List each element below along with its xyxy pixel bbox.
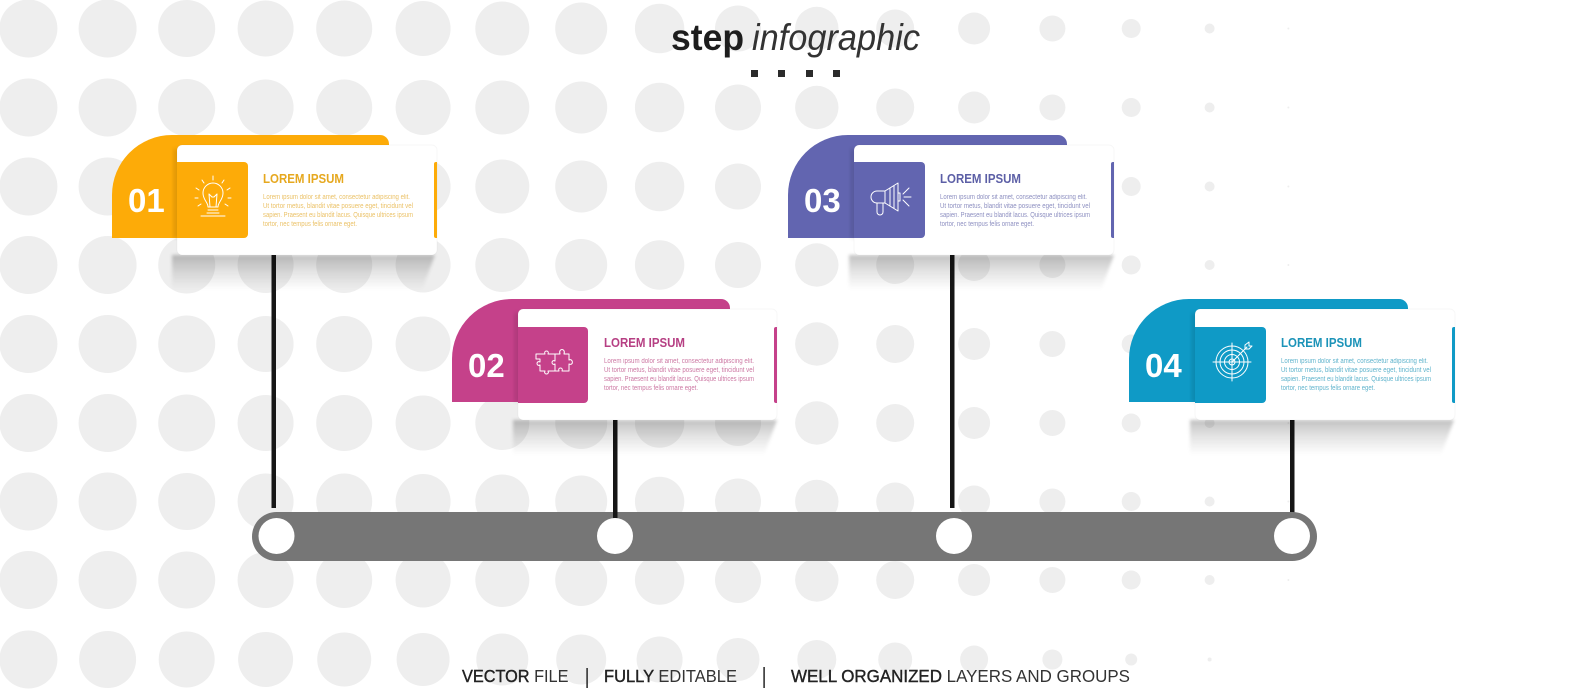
body text: sapien. Praesent eu blandit lacus. Quisque ultrices ipsum <box>1281 376 1431 383</box>
footer: FULLY EDITABLE <box>604 666 737 686</box>
body text: tortor, nec tempus felis ornare eget. <box>1281 385 1375 392</box>
body text: Ut tortor metus, blandit vitae posuere eget, tincidunt vel <box>604 367 754 374</box>
body text: tortor, nec tempus felis ornare eget. <box>604 385 698 392</box>
panel: step 2 <box>452 299 777 455</box>
panel: step 3 <box>788 135 1114 290</box>
card: step 4 <box>1195 309 1455 420</box>
accent bar <box>774 327 777 403</box>
title dots <box>751 70 840 77</box>
tab: step 2 <box>452 299 730 402</box>
body text: Ut tortor metus, blandit vitae posuere eget, tincidunt vel <box>263 203 413 210</box>
timeline node 2 <box>597 518 633 554</box>
stem: step 2 <box>613 415 618 515</box>
icon tile <box>1195 327 1266 403</box>
background dot pattern <box>0 0 1289 688</box>
body text <box>940 194 1090 228</box>
heading: LOREM IPSUM <box>604 336 685 350</box>
tab: step 1 <box>112 135 389 238</box>
body text <box>1281 358 1431 392</box>
timeline node 4 <box>1274 518 1310 554</box>
card: step 2 <box>518 309 777 420</box>
stem end: step 2 <box>613 512 618 518</box>
number 03: 03 <box>804 182 841 219</box>
body text: tortor, nec tempus felis ornare eget. <box>940 221 1034 228</box>
accent bar <box>1111 162 1114 238</box>
body text: Lorem ipsum dolor sit amet, consectetur adipiscing elit. <box>1281 358 1428 365</box>
timeline node 3 <box>936 518 972 554</box>
title: step <box>671 17 744 58</box>
body text <box>604 358 754 392</box>
footer: WELL ORGANIZED LAYERS AND GROUPS <box>791 666 1130 686</box>
stem: step 1 <box>272 250 276 508</box>
body text: Ut tortor metus, blandit vitae posuere eget, tincidunt vel <box>940 203 1090 210</box>
title: infographic <box>752 17 920 58</box>
number 01: 01 <box>128 182 165 219</box>
stem: step 3 <box>950 250 954 508</box>
icon tile <box>518 327 588 403</box>
tab: step 3 <box>788 135 1067 238</box>
heading: LOREM IPSUM <box>940 172 1021 186</box>
timeline bar <box>252 512 1317 561</box>
body text: Lorem ipsum dolor sit amet, consectetur adipiscing elit. <box>604 358 754 365</box>
panel: step 4 <box>1129 299 1455 455</box>
card: step 1 <box>177 145 437 255</box>
icon: light bulb <box>195 176 231 216</box>
body text: sapien. Praesent eu blandit lacus. Quisque ultrices ipsum <box>604 376 754 383</box>
accent bar <box>1452 327 1455 403</box>
icon tile <box>177 162 248 238</box>
body text: sapien. Praesent eu blandit lacus. Quisque ultrices ipsum <box>940 212 1090 219</box>
body text: tortor, nec tempus felis ornare eget. <box>263 221 357 228</box>
number 02: 02 <box>468 347 505 384</box>
body text: Lorem ipsum dolor sit amet, consectetur adipiscing elit. <box>940 194 1087 201</box>
icon tile <box>854 162 925 238</box>
body text: Ut tortor metus, blandit vitae posuere eget, tincidunt vel <box>1281 367 1431 374</box>
body text <box>263 194 413 228</box>
tab: step 4 <box>1129 299 1408 402</box>
card: step 3 <box>854 145 1114 255</box>
body text: sapien. Praesent eu blandit lacus. Quisque ultrices ipsum <box>263 212 413 219</box>
title <box>671 17 920 58</box>
footer: VECTOR FILE <box>462 666 568 686</box>
stem: step 4 <box>1290 415 1294 513</box>
accent bar <box>434 162 437 238</box>
icon: puzzle <box>536 350 572 374</box>
icon: target <box>1213 342 1252 381</box>
heading: LOREM IPSUM <box>263 172 344 186</box>
body text: Lorem ipsum dolor sit amet, consectetur adipiscing elit. <box>263 194 410 201</box>
number 04: 04 <box>1145 347 1182 384</box>
heading: LOREM IPSUM <box>1281 336 1362 350</box>
footer <box>462 666 1130 688</box>
panel: step 1 <box>112 135 437 290</box>
icon: megaphone <box>871 183 911 215</box>
timeline node 1 <box>258 518 294 554</box>
